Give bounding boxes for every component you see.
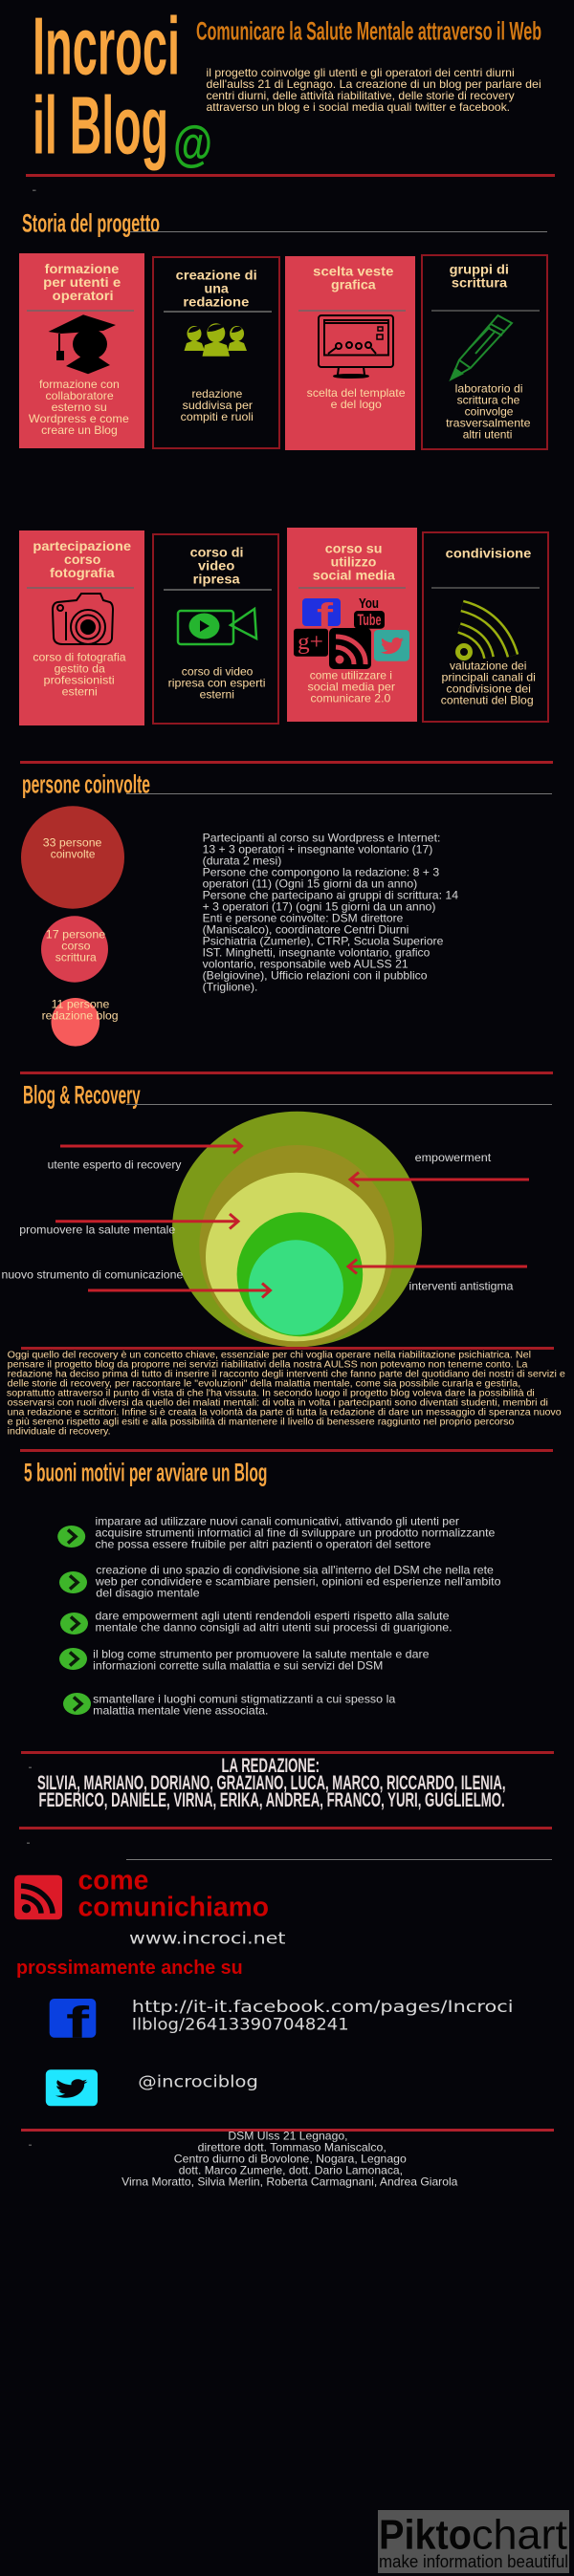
panel: veste grafica [285,256,415,450]
bubble: 33 persone: 33 persone [43,836,102,850]
text: recovery paragraph [7,1350,565,1437]
panel: corso video ripresa [153,534,278,724]
piktochart badge [378,2510,569,2573]
text: recovery paragraph: delle storie di recovery, per raccontare le "evoluzioni" della malattia mentale, come sia possibile curarla e gestirla, [8,1378,520,1389]
text: partecipanti: IST. Minghetti, insegnante volontario, grafico [203,946,430,960]
text: recovery paragraph: individuale di recovery. [8,1426,111,1437]
reason 1: imparare ad utilizzare nuovi canali comunicativi, attivando gli utenti per [96,1515,459,1528]
heading: come comunichiamo: come [78,1866,148,1896]
card text: redazione [191,387,243,400]
text: partecipanti: operatori (11) (Ogni 15 giorni da un anno) [203,877,417,891]
card heading: gruppi di [450,262,509,277]
title: Incroci [33,1,180,92]
card text: esterni [62,685,98,699]
icon: graduation cap [48,314,116,374]
reason 4 [59,1648,430,1673]
card text: valutazione dei [450,660,526,673]
intro text [207,66,541,114]
card text [29,378,129,437]
text: partecipanti [203,832,458,994]
card text: creare un Blog [41,423,118,437]
panel: condivisione [423,532,548,722]
text: recovery paragraph: pensare il progetto blog da proporre nei servizi riabilitativi della nostra AULSS non potevamo non tenerne conto. La [8,1359,528,1370]
reason 5: smantellare i luoghi comuni stigmatizzanti a cui spesso la [93,1693,396,1706]
card text: suddivisa per [183,399,253,412]
arrow: utente esperto [60,1139,241,1153]
icon: sketched RSS [457,606,513,658]
link: twitter handle: @incrociblog [138,2072,258,2091]
bubble: 11 persone: redazione blog [42,1009,119,1023]
text: recovery paragraph: soprattutto attraverso il punto di vista di che l'ha vissuta. In secondo luogo il progetto blog voleva dare la possibilità di [7,1388,535,1398]
icon: green at sign: @ [173,117,212,172]
arrow: nuovo strumento [88,1283,270,1298]
card heading: operatori [53,288,114,303]
card heading: una [205,281,229,296]
intro text: dell'aulss 21 di Legnago. La creazione di un blog per parlare dei [207,77,541,91]
reason 2 [59,1564,501,1600]
footer credits: Centro diurno di Bovolone, Nogara, Legnago [174,2152,407,2165]
reason 1: che possa essere fruibile per altri pazienti o operatori del settore [96,1538,431,1551]
link: facebook: Ilblog/264133907048241 [132,2015,349,2034]
card text: Wordpress e come [29,412,129,425]
reason 2: creazione di uno spazio di condivisione sia all'interno del DSM che nella rete [96,1564,494,1577]
card text [307,386,406,411]
card text: trasversalmente [446,417,531,430]
icon: facebook: f [66,1998,90,2047]
card text: laboratorio di [455,382,522,396]
footer credits [121,2129,458,2188]
icon: social media cluster [294,595,409,669]
reason 3: dare empowerment agli utenti rendendoli esperti rispetto alla salute [96,1610,450,1623]
card heading: corso su [325,541,383,556]
text: partecipanti: Psichiatria (Zumerle), CTRP, Scuola Superiore [203,935,444,948]
card text: comunicare 2.0 [310,691,391,704]
icon: facebook [50,1998,96,2047]
card heading [313,541,395,583]
card text: condivisione dei [446,682,531,696]
card text: social media per [308,680,395,693]
card heading: video [198,558,234,574]
heading: come comunichiamo: comunichiamo [78,1892,269,1922]
card text: collaboratore [46,389,114,402]
intro text: attraverso un blog e i social media quali twitter e facebook. [207,100,510,114]
heading: persone coinvolte: persone coinvolte [22,769,150,798]
bubble: 33 persone: coinvolte [51,848,96,861]
card text: formazione con [39,378,120,391]
card text [308,668,395,704]
card heading: redazione [183,294,250,310]
card heading: per utenti e [43,274,121,290]
reason 3: mentale che danno consigli ad altri utenti sui processi di guarigione. [96,1621,453,1634]
card heading: corso [64,552,100,567]
card text: scelta del template [307,386,406,400]
card text: principali canali di [442,671,536,684]
reason 5 [63,1693,396,1718]
card text: altri utenti [463,428,512,442]
text: partecipanti: (Triglione). [203,981,257,994]
text: recovery paragraph: redazione ha deciso prima di tutto di inserire il racconto degli interventi che fanno parte del quotidiano dei nostri di servizi e [8,1369,565,1379]
card heading: social media [313,568,395,583]
card heading: utilizzo [331,554,376,570]
panel: corso fotografia [19,530,144,725]
card heading: formazione [45,261,120,276]
text: partecipanti: Enti e persone coinvolte: DSM direttore [203,912,404,925]
card text: compiti e ruoli [181,410,254,423]
heading: blog & recovery: Blog & Recovery [23,1080,141,1109]
text: recovery paragraph: Oggi quello del recovery è un concetto chiave, essenziale per chi voglia operare nella riabilitazione psichiatrica. Nel [8,1350,531,1360]
card heading: partecipazione [33,538,131,553]
text: partecipanti: (durata 2 mesi) [203,855,281,868]
text: recovery paragraph: osservarsi con ruoli diversi da quello dei malati mentali: di volta in volta i partecipanti sono diventati studenti, membri di [8,1397,548,1408]
card heading: scrittura [452,275,507,291]
card heading [176,268,257,310]
reason 5: malattia mentale viene associata. [93,1704,268,1718]
card text: gestito da [55,662,105,676]
card text: ripresa con esperti [168,677,266,690]
card text [441,660,536,707]
panel: redazione [153,257,279,448]
label: promuovere: promuovere la salute mentale [19,1223,176,1236]
icon: twitter [46,2069,98,2106]
card heading [450,262,509,291]
bubble: 33 persone [21,806,124,909]
panel: formazione [19,253,144,448]
link: facebook [132,1998,514,2034]
icon: computer monitor [319,315,393,378]
text: recovery paragraph: una redazione e scrittori. Infine si è creata la volontà da parte di tutta la redazione di dare un messaggio di speranza nuovo [8,1407,562,1418]
footer credits: Virna Moratto, Silvia Merlin, Roberta Carmagnani, Andrea Giarola [121,2175,458,2188]
panel: social media [287,528,417,722]
card heading: condivisione [446,546,532,561]
link: facebook: http://it-it.facebook.com/pages/Incroci [132,1998,514,2017]
heading: prossimamente: prossimamente anche su [16,1958,243,1979]
text: partecipanti: Partecipanti al corso su Wordpress e Internet: [203,832,440,845]
title [33,1,180,172]
heading: come comunichiamo [78,1866,269,1922]
reason 2: web per condividere e scambiare pensieri, opinioni ed esperienze nell'ambito [95,1575,501,1589]
card text: come utilizzare i [310,668,392,682]
footer credits: DSM Ulss 21 Legnago, [228,2129,348,2142]
card heading: corso di [190,545,243,560]
text: partecipanti: (Belgiovine), Ufficio relazioni con il pubblico [203,969,428,983]
footer credits: dott. Marco Zumerle, dott. Dario Lamonaca, [179,2163,403,2176]
arrow: interventi [348,1260,527,1273]
text: la redazione [37,1755,505,1811]
reason 4: il blog come strumento per promuovere la salute mentale e dare [93,1648,430,1661]
card text: corso di fotografia [33,651,126,664]
reason 3 [60,1610,453,1634]
heading: 5 buoni motivi: 5 buoni motivi per avviare un Blog [24,1458,267,1486]
title: il Blog [33,81,168,172]
bubble: 17 persone: scrittura [55,951,97,964]
text: partecipanti: Persone che compongono la redazione: 8 + 3 [203,866,440,879]
label: interventi: interventi antistigma [409,1279,514,1292]
reason 1 [57,1515,496,1551]
card text [446,382,531,442]
bubble: 11 persone: 11 persone [52,998,110,1011]
heading: storia del progetto: Storia del progetto [22,208,160,237]
piktochart badge: Pikto [379,2512,472,2559]
card heading [190,545,243,587]
card text: professionisti [44,674,115,687]
bubble: 17 persone: corso [61,940,91,953]
card text: corso di video [182,665,254,679]
text: partecipanti: Persone che partecipano ai gruppi di scrittura: 14 [203,889,458,902]
reason 1: acquisire strumenti informatici al fine di sviluppare un prodotto normalizzante [96,1526,496,1540]
icon: red RSS [14,1875,62,1919]
card heading [313,264,394,292]
card heading: ripresa [193,572,240,587]
bubble: 17 persone [41,916,108,983]
text: partecipanti: + 3 operatori (17) (ogni 15 giorni da un anno) [203,900,435,914]
card heading [33,538,131,580]
icon: social media cluster: g+ [298,630,323,655]
icon: social media cluster: You [359,595,379,612]
reason 2: del disagio mentale [96,1587,200,1600]
intro text: centri diurni, delle attività riabilitative, delle storie di recovery [207,89,515,102]
arrow: empowerment [350,1172,529,1187]
bubble: 17 persone: 17 persone [46,928,106,942]
text: partecipanti: 13 + 3 operatori + insegnante volontario (17) [203,843,432,856]
card text [168,665,266,702]
icon: social media cluster: f [317,597,334,634]
card text: scrittura che [457,394,520,407]
footer credits: direttore dott. Tommaso Maniscalco, [198,2140,386,2154]
icon: camera [53,594,113,644]
link: website: www.incroci.net [129,1929,286,1948]
piktochart badge: chart [472,2512,567,2559]
icon: social media cluster: Tube [358,611,381,629]
card heading: creazione di [176,268,257,283]
arrow: promuovere [55,1214,238,1229]
text: recovery paragraph: e più sereno rispetto agli esiti e alla possibilità di mantenere il livello di benessere raggiunto nel proprio percorso [8,1417,515,1427]
reason 4: informazioni corrette sulla malattia e sui servizi del DSM [93,1659,383,1673]
label: utente esperto: utente esperto di recovery [48,1158,181,1171]
icon: video camera [178,609,256,644]
label: empowerment: empowerment [415,1151,492,1164]
panel: gruppi di scrittura [422,255,547,449]
card text: contenuti del Blog [441,694,534,707]
card text [33,651,126,699]
card text: coinvolge [465,405,514,419]
card text: esterno su [52,400,107,414]
text: la redazione: LA REDAZIONE: [222,1755,320,1777]
card heading [43,261,121,303]
icon: pencil [452,315,512,379]
text: partecipanti: (Maniscalco), coordinatore Centri Diurni [203,923,408,937]
bubble: 11 persone [42,998,119,1047]
card text [181,387,254,423]
text: partecipanti: volontario, responsabile web AULSS 21 [203,958,408,971]
card heading: scelta veste [313,264,394,279]
card text: e del logo [331,398,382,411]
card text: esterni [200,688,234,702]
card heading: grafica [331,277,376,292]
card heading: fotografia [50,565,115,580]
label: nuovo strumento: nuovo strumento di comunicazione [2,1267,184,1281]
chart: nested ellipses [172,1112,422,1347]
intro text: il progetto coinvolge gli utenti e gli operatori dei centri diurni [207,66,515,79]
icon: group of people [184,323,247,357]
